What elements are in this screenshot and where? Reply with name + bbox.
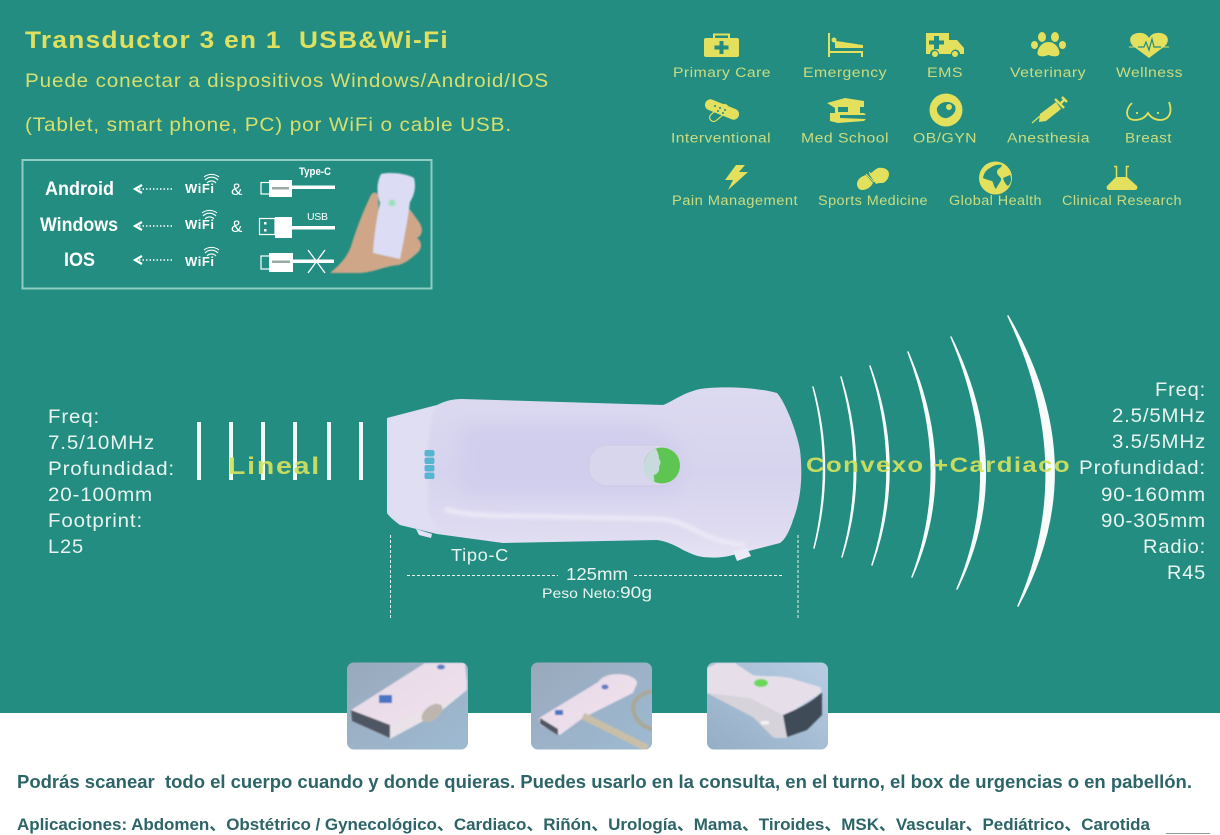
right specifications: 3.5/5MHz <box>1112 431 1206 453</box>
photo: cabled probe <box>531 662 652 750</box>
item: Breast: Breast <box>1125 130 1172 146</box>
item: OB/GYN: OB/GYN <box>913 130 977 146</box>
text: scanning statement: Podrás scanear todo el cuerpo cuando y donde quieras. Puedes usarlo en la consulta, en el turno, el box de urgencias o en pabellón. <box>17 771 1192 792</box>
row: Windows <box>40 210 335 238</box>
left specifications: L25 <box>48 536 84 558</box>
right specifications: Radio: <box>1143 536 1206 558</box>
item: EMS <box>926 33 964 80</box>
small rule bottom right <box>1166 833 1210 834</box>
row: IOS: WiFi <box>185 254 214 269</box>
label: net weight: Peso Neto: 90g <box>542 583 652 602</box>
right specifications: 90-160mm <box>1101 484 1206 506</box>
label: Convexo +Cardiaco: Convexo +Cardiaco <box>806 453 1071 477</box>
right specifications <box>1079 379 1206 584</box>
item: Sports Medicine <box>818 168 928 208</box>
item: Wellness: Wellness <box>1116 65 1183 80</box>
item: Interventional <box>671 98 771 146</box>
text: applications: Aplicaciones: Abdomen、Obstétrico / Gynecológico、Cardiaco、Riñón、Urología、Mama、Tiroides、MSK、Vascular、Pediátrico、Carotida <box>17 815 1151 834</box>
power button <box>644 448 680 484</box>
item: OB/GYN <box>913 94 977 146</box>
item: Veterinary: Veterinary <box>1010 65 1086 80</box>
item: Interventional: Interventional <box>671 130 771 146</box>
button slot <box>589 445 679 486</box>
left specifications <box>48 406 175 558</box>
row: Windows: WiFi <box>185 217 214 232</box>
right specifications: 2.5/5MHz <box>1112 405 1206 427</box>
item: Clinical Research: Clinical Research <box>1062 193 1182 208</box>
panel: connectivity <box>22 160 432 288</box>
item: Emergency <box>803 33 887 80</box>
right specifications: R45 <box>1167 562 1206 584</box>
label: 125mm: 125mm <box>566 564 628 584</box>
row: Android: Android <box>45 179 114 200</box>
left specifications: Profundidad: <box>48 458 175 480</box>
left specifications: 20-100mm <box>48 484 153 506</box>
subtitle <box>25 70 549 136</box>
icon: hand holding probe <box>330 173 422 273</box>
item: Sports Medicine: Sports Medicine <box>818 193 928 208</box>
item: Global Health: Global Health <box>949 193 1042 208</box>
left specifications: Freq: <box>48 406 100 428</box>
row: Android: & <box>231 180 243 199</box>
indicator: battery LEDs <box>424 450 434 479</box>
convex wave arcs <box>813 316 1054 606</box>
item: Breast <box>1125 102 1172 146</box>
right specifications: Freq: <box>1155 379 1206 401</box>
item: EMS: EMS <box>927 65 963 80</box>
item: Anesthesia: Anesthesia <box>1007 130 1090 146</box>
item: Wellness <box>1116 33 1183 80</box>
item: Med School <box>801 98 889 146</box>
right specifications: Profundidad: <box>1079 457 1206 479</box>
right specifications: 90-305mm <box>1101 510 1206 532</box>
subtitle: (Tablet, smart phone, PC) por WiFi o cable USB. <box>25 114 512 136</box>
title: Transductor 3 en 1 USB&Wi-Fi <box>25 27 449 54</box>
row: Android: Type-C <box>299 166 331 178</box>
connector tab <box>733 548 751 561</box>
white bottom band <box>0 713 1220 835</box>
photo: convex head <box>707 662 828 750</box>
item: Pain Management: Pain Management <box>672 193 798 208</box>
item: Clinical Research <box>1062 166 1182 208</box>
row: Windows: USB <box>307 211 328 223</box>
dimension line <box>390 535 798 618</box>
item: Veterinary <box>1010 32 1086 80</box>
icon grid: specialties <box>671 32 1183 208</box>
row: IOS <box>64 247 334 273</box>
photo: linear head <box>347 662 468 750</box>
label: Tipo-C: Tipo-C <box>451 545 509 565</box>
row: Windows: Windows <box>40 215 118 236</box>
item: Primary Care <box>673 34 771 80</box>
subtitle: Puede conectar a dispositivos Windows/Android/IOS <box>25 70 549 92</box>
item: Anesthesia <box>1007 97 1090 146</box>
row: Android <box>45 166 335 200</box>
item: Global Health <box>949 162 1042 208</box>
linear wave lines <box>197 422 363 480</box>
probe device <box>387 387 801 561</box>
left specifications: Footprint: <box>48 510 143 532</box>
item: Pain Management <box>672 165 798 208</box>
row: Android: WiFi <box>185 181 214 196</box>
row: Windows: & <box>231 217 243 236</box>
left specifications: 7.5/10MHz <box>48 432 155 454</box>
item: Med School: Med School <box>801 130 889 146</box>
item: Primary Care: Primary Care <box>673 65 771 80</box>
row: IOS: IOS <box>64 250 95 271</box>
item: Emergency: Emergency <box>803 65 887 80</box>
label: Lineal: Lineal <box>228 453 321 480</box>
